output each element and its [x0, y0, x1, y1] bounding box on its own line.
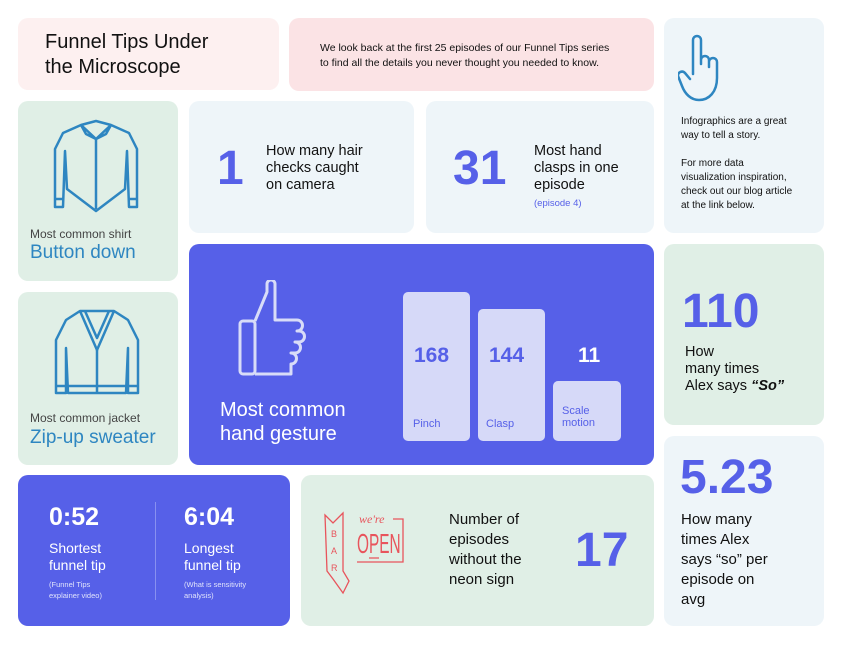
stat label: (episode 4) [534, 198, 582, 209]
bar chart [403, 292, 621, 441]
icon: neon sign: we're [359, 512, 385, 526]
stat number: 5.23 [680, 451, 773, 504]
stat label: on camera [266, 177, 335, 193]
longest: Longest [184, 540, 234, 556]
shortest: (Funnel Tips [49, 580, 90, 589]
stat label [681, 511, 768, 608]
intro text: We look back at the first 25 episodes of our Funnel Tips series [320, 42, 609, 54]
neon label: episodes [449, 531, 509, 548]
longest: funnel tip [184, 557, 241, 573]
shortest [49, 503, 106, 600]
stat label: How many [681, 511, 752, 528]
shirt value: Button down [30, 242, 136, 263]
note text: check out our blog article [681, 186, 792, 197]
shortest: 0:52 [49, 503, 99, 531]
stat label: How many hair [266, 143, 363, 159]
stat label: checks caught [266, 160, 359, 176]
intro text [320, 42, 609, 69]
longest [184, 503, 246, 600]
panel: hand gesture [189, 244, 654, 465]
stat label: Alex says “So” [685, 378, 784, 394]
title: the Microscope [45, 56, 181, 78]
neon label: Number of [449, 511, 519, 528]
stat number: 17 [575, 524, 628, 577]
icon: jacket [54, 310, 140, 394]
panel: intro [289, 18, 654, 91]
stat label: How [685, 344, 714, 360]
panel: title [18, 18, 279, 90]
panel: jacket [18, 292, 178, 465]
icon: neon sign: B [331, 529, 337, 539]
bar chart: motion [562, 417, 595, 429]
note text: For more data [681, 158, 744, 169]
bar chart: Clasp [486, 418, 514, 430]
title [45, 31, 208, 78]
longest: 6:04 [184, 503, 234, 531]
stat number: 1 [217, 142, 244, 195]
panel: neon sign [301, 475, 654, 626]
title: Funnel Tips Under [45, 31, 208, 53]
note text: at the link below. [681, 200, 755, 211]
stat label: says “so” per [681, 551, 768, 568]
stat label: Most hand [534, 143, 602, 159]
panel: hand clasps [426, 101, 654, 233]
icon: pointing hand [678, 34, 718, 102]
panel: hair checks [189, 101, 414, 233]
panel: shirt [18, 101, 178, 281]
bar chart: 144 [489, 344, 524, 367]
neon label: neon sign [449, 571, 514, 588]
bar chart: Pinch [413, 418, 441, 430]
shirt label: Most common shirt [30, 227, 131, 241]
shortest: explainer video) [49, 591, 102, 600]
longest: (What is sensitivity [184, 580, 246, 589]
stat label [266, 143, 363, 193]
note text: Infographics are a great [681, 116, 787, 127]
icon: neon sign [324, 512, 404, 594]
bar chart: 11 [578, 344, 600, 367]
stat label: episode [534, 177, 585, 193]
bar chart: 168 [414, 344, 449, 367]
neon label: without the [449, 551, 522, 568]
bar chart: Scale [562, 405, 590, 417]
note text: visualization inspiration, [681, 172, 787, 183]
stat number: 110 [682, 285, 759, 338]
stat label [534, 143, 619, 209]
intro text: to find all the details you never thought you needed to know. [320, 57, 599, 69]
longest: analysis) [184, 591, 214, 600]
stat label: episode on [681, 571, 754, 588]
stat label: avg [681, 591, 705, 608]
icon: neon sign: R [331, 563, 338, 573]
panel: 110 [664, 244, 824, 425]
icon: neon sign: A [331, 546, 337, 556]
gesture title: Most common [220, 399, 346, 421]
stat label: clasps in one [534, 160, 619, 176]
gesture title [220, 399, 346, 445]
icon: neon sign: OPEN [357, 528, 401, 559]
shortest: funnel tip [49, 557, 106, 573]
stat label [685, 344, 784, 394]
panel: infographics note [664, 18, 824, 233]
neon label [449, 511, 522, 588]
note text [681, 116, 792, 211]
jacket label: Most common jacket [30, 411, 140, 425]
stat label: many times [685, 361, 759, 377]
icon: thumbs up [238, 280, 306, 376]
panel: 5.23 [664, 436, 824, 626]
icon: shirt [54, 120, 138, 212]
stat number: 31 [453, 142, 506, 195]
shortest: Shortest [49, 540, 101, 556]
gesture title: hand gesture [220, 423, 337, 445]
panel: funnel tip lengths [18, 475, 290, 626]
jacket value: Zip-up sweater [30, 427, 156, 448]
stat label: times Alex [681, 531, 749, 548]
note text: way to tell a story. [681, 130, 760, 141]
